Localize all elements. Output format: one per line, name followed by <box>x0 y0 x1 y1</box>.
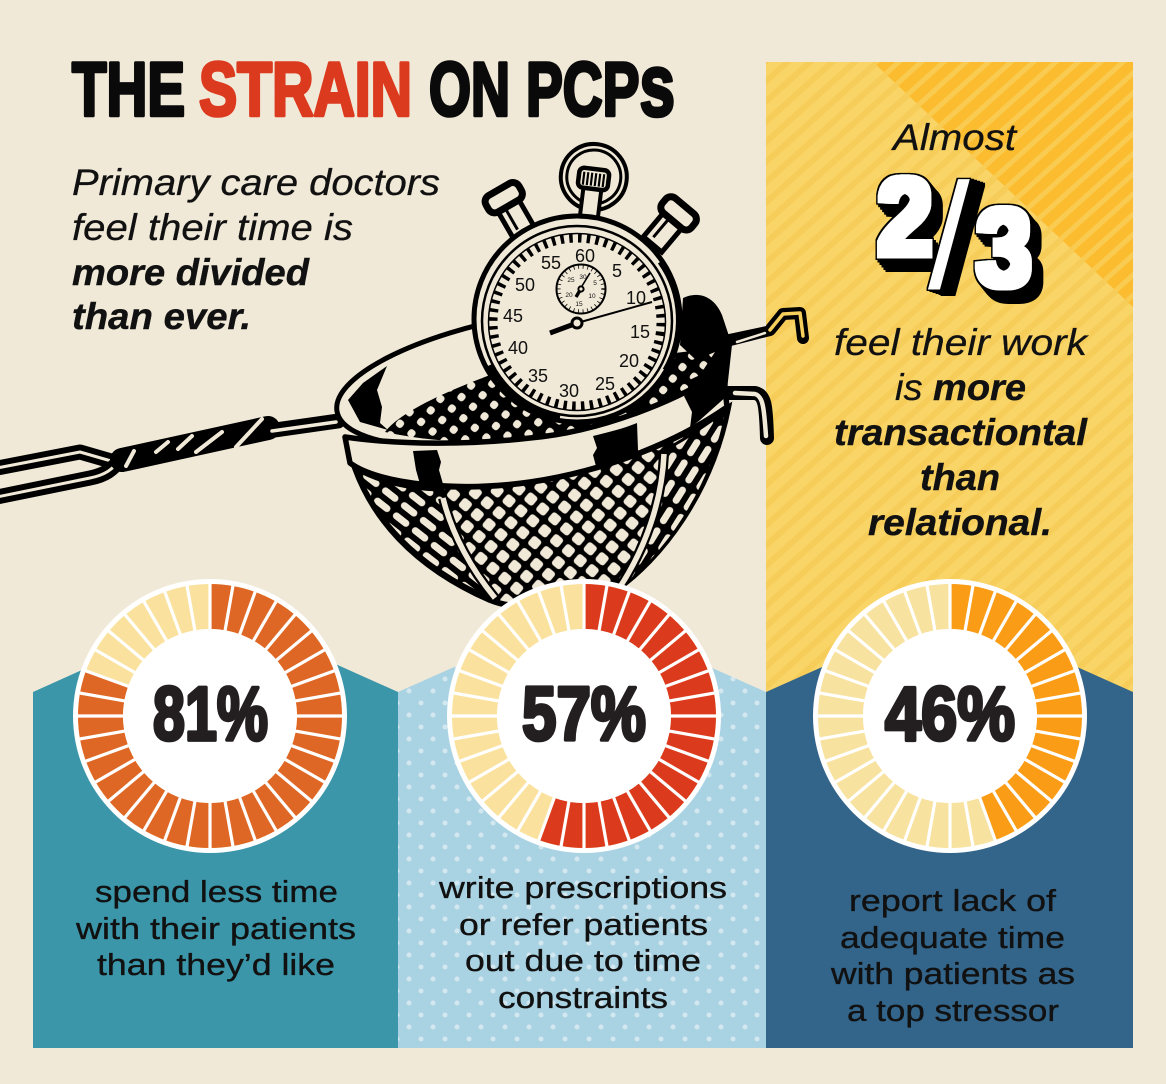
caption: 81% <box>75 874 356 982</box>
yellow callout text: transactiontal <box>834 412 1088 453</box>
caption: 46%: report lack of <box>849 883 1056 918</box>
watch numbers: 50 <box>515 275 535 295</box>
watch numbers: 60 <box>575 246 595 266</box>
title: STRAIN <box>199 48 412 132</box>
title: THE <box>72 48 185 132</box>
illustration: stopwatch in a strainer <box>0 140 803 606</box>
left pusher <box>483 180 540 242</box>
donut chart: 46%: 46% <box>885 672 1015 757</box>
panel: dotted light blue background <box>398 610 766 1048</box>
title: ON <box>429 48 510 132</box>
sub-dial <box>556 264 606 314</box>
title: PCPs <box>526 36 675 134</box>
yellow callout text: Almost <box>891 117 1018 158</box>
donut chart: 81%: 81% <box>153 672 268 757</box>
watch numbers: 45 <box>503 306 523 326</box>
strainer rim back <box>326 282 738 472</box>
two-thirds figure: 2 <box>877 156 933 279</box>
watch numbers: 10 <box>626 288 646 308</box>
donut chart: 81% <box>73 579 347 853</box>
intro text: feel their time is <box>72 207 353 248</box>
panel: yellow callout background <box>766 62 1133 702</box>
caption: 81%: spend less time <box>95 874 338 909</box>
yellow callout text: feel their work <box>834 322 1090 363</box>
donut chart: 57%: 57% <box>522 672 646 757</box>
watch numbers: 55 <box>541 253 561 273</box>
panel: teal background <box>33 610 398 1048</box>
caption: 57%: or refer patients <box>459 907 708 942</box>
watch numbers: 5 <box>612 261 622 281</box>
yellow callout text <box>834 117 1090 543</box>
two-thirds figure: 3 <box>976 187 1032 310</box>
intro text <box>72 162 440 337</box>
watch numbers: 40 <box>508 338 528 358</box>
right pusher <box>638 194 699 257</box>
caption: 46% <box>830 883 1075 1028</box>
intro text: more divided <box>72 252 310 293</box>
two-thirds figure <box>877 152 1032 320</box>
sub-dial: 5 <box>593 280 597 287</box>
caption: 81%: with their patients <box>75 911 356 946</box>
panel: navy background <box>766 610 1133 1048</box>
strainer band <box>345 368 728 486</box>
yellow callout text: is more <box>895 367 1026 408</box>
sub-dial: 20 <box>565 292 573 299</box>
caption: 57%: out due to time <box>465 943 701 978</box>
sub-dial: 25 <box>567 277 575 284</box>
yellow callout text: relational. <box>868 502 1052 543</box>
title <box>72 36 675 134</box>
strainer side hooks <box>728 313 803 438</box>
yellow callout text: than <box>920 457 1000 498</box>
donut chart: 46% <box>813 579 1087 853</box>
watch case <box>474 216 680 422</box>
stopwatch <box>474 140 699 422</box>
watch ticks <box>483 228 671 416</box>
caption: 57%: write prescriptions <box>438 870 727 905</box>
watch numbers: 25 <box>595 374 615 394</box>
caption: 46%: with patients as <box>830 956 1075 991</box>
strainer handle <box>0 419 338 498</box>
caption: 57% <box>438 870 727 1015</box>
watch numbers: 30 <box>559 381 579 401</box>
sweep hand <box>550 302 652 333</box>
intro text: Primary care doctors <box>72 162 440 203</box>
caption: 57%: constraints <box>498 980 668 1015</box>
watch numbers: 15 <box>630 322 650 342</box>
watch numbers: 35 <box>528 366 548 386</box>
caption: 46%: adequate time <box>840 920 1065 955</box>
donut chart: 57% <box>447 579 721 853</box>
two-thirds figure: / <box>928 152 970 320</box>
strainer bowl mesh <box>355 408 728 606</box>
sub-dial: 30 <box>579 274 587 281</box>
caption: 81%: than they’d like <box>97 947 335 982</box>
sub-dial: 15 <box>575 301 583 308</box>
strainer interior <box>348 295 732 442</box>
intro text: than ever. <box>72 296 251 337</box>
caption: 46%: a top stressor <box>847 993 1059 1028</box>
watch numbers <box>503 246 650 401</box>
crown ring <box>556 140 631 225</box>
watch numbers: 20 <box>619 351 639 371</box>
sub-dial: 10 <box>588 293 596 300</box>
